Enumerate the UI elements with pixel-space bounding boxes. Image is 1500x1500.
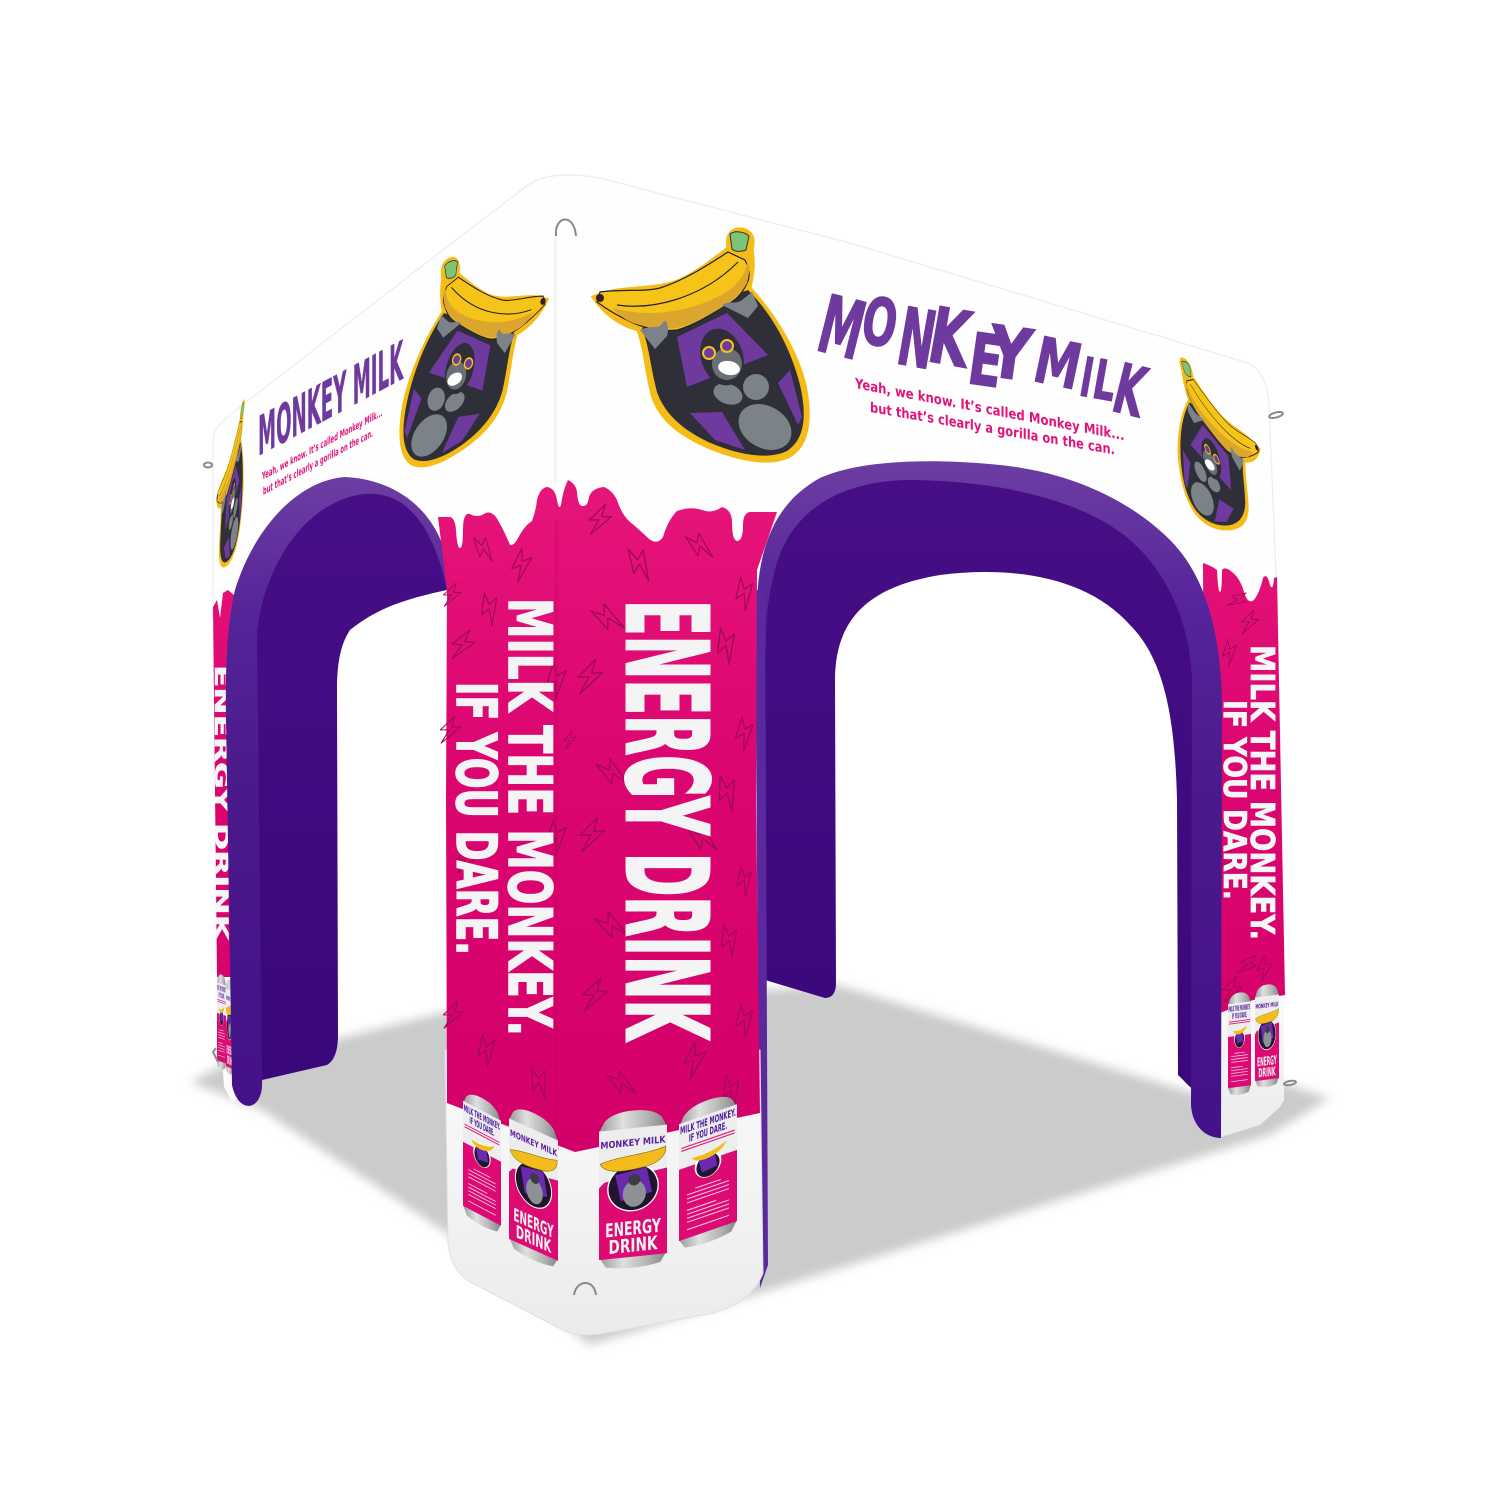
logo wordmark: right face: L xyxy=(1088,347,1121,414)
tagline: left face xyxy=(262,407,383,498)
right pillar cans xyxy=(1228,983,1279,1096)
right pillar pink band xyxy=(1203,563,1285,1013)
right pillar xyxy=(1203,563,1285,1138)
front pillar white base xyxy=(445,1050,763,1335)
logo wordmark: right face: M xyxy=(1028,324,1088,405)
left pillar white base xyxy=(213,590,245,1103)
right arch xyxy=(757,461,1222,1138)
tagline: left face: but that’s clearly a gorilla on the can. xyxy=(263,427,373,498)
gorilla badge: front left xyxy=(399,240,549,471)
text: MONKEY MILK xyxy=(258,328,404,469)
right pillar slogan xyxy=(1216,645,1282,940)
front pillar purple edge xyxy=(755,590,768,1288)
left pillar slogan: ENERGY DRINK xyxy=(210,665,232,942)
left arch outer trim and leg xyxy=(226,477,447,1106)
logo wordmark: right face xyxy=(809,278,1155,434)
front pillar cans xyxy=(463,1088,737,1271)
right pillar white base xyxy=(1205,985,1284,1138)
ground shadow xyxy=(190,985,1330,1345)
logo wordmark: right face: I xyxy=(1075,345,1098,410)
left pillar cans xyxy=(217,973,233,1076)
gorilla badge: far right xyxy=(1154,341,1284,570)
logo wordmark: right face: N xyxy=(891,292,942,389)
right pillar slogan: MILK THE MONKEY. xyxy=(1243,645,1282,940)
right pillar slogan: IF YOU DARE. xyxy=(1216,700,1252,900)
tagline: right face: Yeah, we know. It’s called Monkey Milk... xyxy=(854,376,1124,444)
front pillar lightning pattern xyxy=(438,502,762,1109)
left arch xyxy=(226,477,447,1106)
logo wordmark: right face: K xyxy=(1105,349,1155,434)
left pillar pink band xyxy=(213,590,240,977)
canopy top edge outline xyxy=(213,175,1278,620)
slogan: milk the monkey: MILK THE MONKEY. xyxy=(494,598,564,1036)
logo wordmark: right face: Y xyxy=(982,310,1037,399)
tagline: right face: but that’s clearly a gorilla on the can. xyxy=(870,400,1115,459)
logo wordmark: right face: M xyxy=(809,278,874,379)
gorilla badge: far left xyxy=(206,379,253,614)
right pillar lightning pattern xyxy=(1216,587,1275,1006)
left pillar xyxy=(210,590,245,1103)
front pillar xyxy=(438,480,777,1335)
slogan: if you dare: IF YOU DARE. xyxy=(444,682,508,955)
tagline: left face: Yeah, we know. It’s called Monkey Milk... xyxy=(262,407,383,483)
front pillar centre seam xyxy=(554,520,559,1150)
logo wordmark: right face: O xyxy=(856,282,904,364)
tie-down rings xyxy=(204,219,1296,1295)
logo wordmark: right face: E xyxy=(963,317,1008,405)
right arch inner fabric xyxy=(762,469,1200,1088)
gorilla badge: front right large xyxy=(593,229,808,461)
logo wordmark: right face: K xyxy=(922,291,979,386)
left arch inner fabric xyxy=(250,490,447,1080)
tent top white canopy xyxy=(213,175,1278,620)
canopy seam highlight xyxy=(554,235,557,485)
right arch outer trim and leg xyxy=(757,461,1222,1138)
front pillar pink panel with drips xyxy=(438,480,777,1152)
